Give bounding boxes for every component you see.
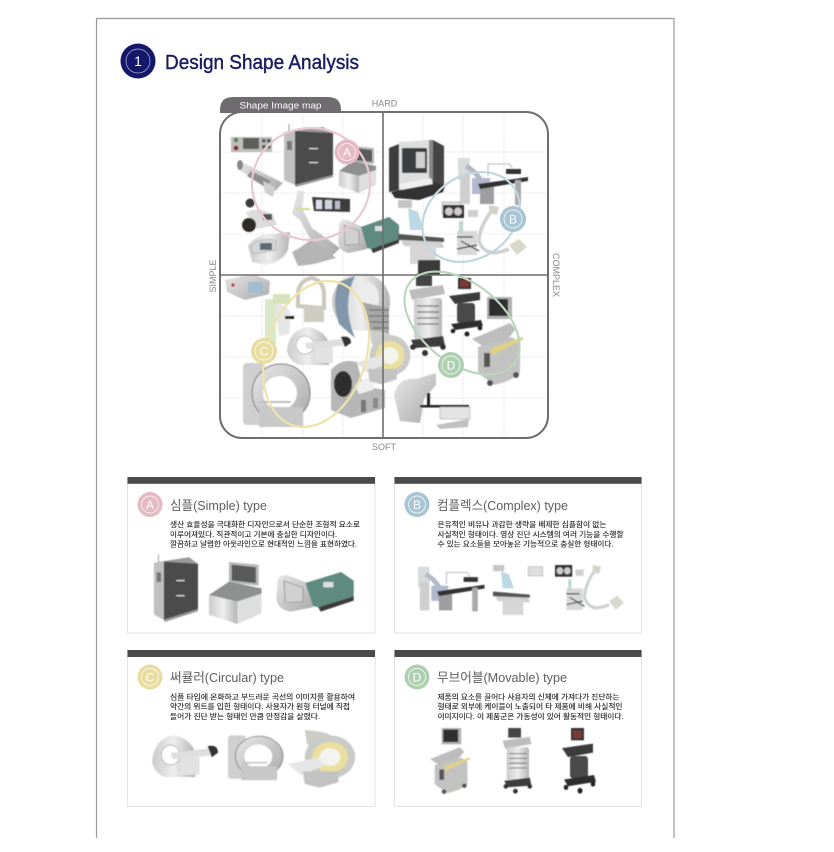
map outline and axes — [220, 112, 548, 438]
heading: simple: 심플(Simple) type — [170, 498, 267, 513]
equipment: complex quadrant — [389, 140, 528, 275]
page frame — [96, 18, 674, 838]
badge B on map: B — [509, 212, 517, 226]
badge C on map: C — [260, 344, 269, 358]
description: complex: 사실적인 형태이다. 영상 진단 시스템의 여러 기능을 수행할 — [438, 530, 624, 539]
badge A — [138, 492, 162, 517]
description: circular: 들어가 진단 받는 형태인 만큼 안정감을 살렸다. — [170, 712, 320, 721]
description: movable: 이미지이다. 이 제품군은 가동성이 있어 활동적인 형태이다. — [438, 712, 624, 721]
description: circular: 심플 타입에 온화하고 부드러운 곡선의 이미지를 활용하여 — [170, 692, 355, 702]
axis label: simple: SIMPLE — [208, 259, 218, 293]
badge B — [404, 492, 430, 517]
badge B: B — [413, 498, 421, 512]
panel: simple type — [128, 477, 375, 633]
equipment: simple quadrant — [225, 124, 399, 300]
badge D on map: D — [447, 358, 456, 372]
badge B on map — [500, 206, 526, 232]
description: simple — [170, 520, 360, 548]
badge A on map — [334, 140, 360, 164]
description: movable: 제품의 요소를 끌어다 사용자의 신체에 가져다가 진단하는 — [438, 692, 620, 702]
badge A on map: A — [343, 146, 351, 160]
description: circular — [170, 692, 355, 721]
description: simple: 이루어져있다. 직관적이고 기본에 충실한 디자인이다. — [170, 530, 337, 539]
map tab: Shape Image map — [240, 100, 322, 112]
heading: movable: 무브어블(Movable) type — [437, 670, 567, 685]
description: complex: 은유적인 비유나 과감한 생략을 배제한 심플함이 없는 — [438, 520, 607, 529]
badge D on map — [438, 352, 464, 378]
badge C on map — [251, 338, 277, 364]
section number badge: 1 — [134, 53, 142, 69]
badge A: A — [146, 498, 154, 512]
description: movable — [438, 692, 624, 721]
axis label: complex: COMPLEX — [551, 253, 561, 297]
description: simple: 깔끔하고 날렵한 아웃라인으로 현대적인 느낌을 표현하였다. — [170, 540, 357, 548]
axis label: hard: HARD — [372, 98, 398, 108]
badge D: D — [413, 670, 422, 684]
panel: movable type — [394, 650, 642, 806]
product images: circular — [152, 730, 355, 788]
product images: simple — [154, 554, 354, 624]
product images: movable — [430, 728, 596, 794]
panel: shape image map — [220, 112, 548, 441]
panel: circular type — [128, 650, 375, 806]
cluster ellipse B — [405, 154, 537, 280]
heading: complex: 컴플렉스(Complex) type — [437, 498, 568, 513]
badge C: C — [146, 670, 155, 684]
description: circular: 약간의 위트를 입힌 형태이다. 사용자가 원형 터널에 직접 — [170, 702, 350, 711]
axis label: soft: SOFT — [372, 442, 397, 452]
cluster ellipse D — [385, 251, 539, 395]
cluster ellipse A — [252, 128, 370, 240]
badge C — [138, 664, 162, 690]
equipment: circular group — [243, 273, 470, 429]
description: movable: 형태로 외부에 케이블이 노출되어 타 제품에 비해 사실적인 — [438, 702, 623, 711]
product images: complex — [418, 565, 624, 615]
section number badge — [120, 44, 156, 78]
cluster ellipse C — [245, 267, 387, 441]
title: Design Shape Analysis — [165, 52, 359, 74]
heading: circular: 써큘러(Circular) type — [170, 670, 284, 685]
map tab — [220, 97, 341, 113]
equipment: movable group — [409, 274, 524, 386]
panel: complex type — [394, 477, 642, 633]
description: simple: 생산 효율성을 극대화한 디자인으로서 단순한 조형적 요소로 — [170, 520, 360, 529]
badge D — [404, 664, 430, 690]
description: complex: 수 있는 요소들을 모아놓은 기능적으로 충실한 형태이다. — [438, 540, 614, 548]
description: complex — [438, 520, 624, 548]
